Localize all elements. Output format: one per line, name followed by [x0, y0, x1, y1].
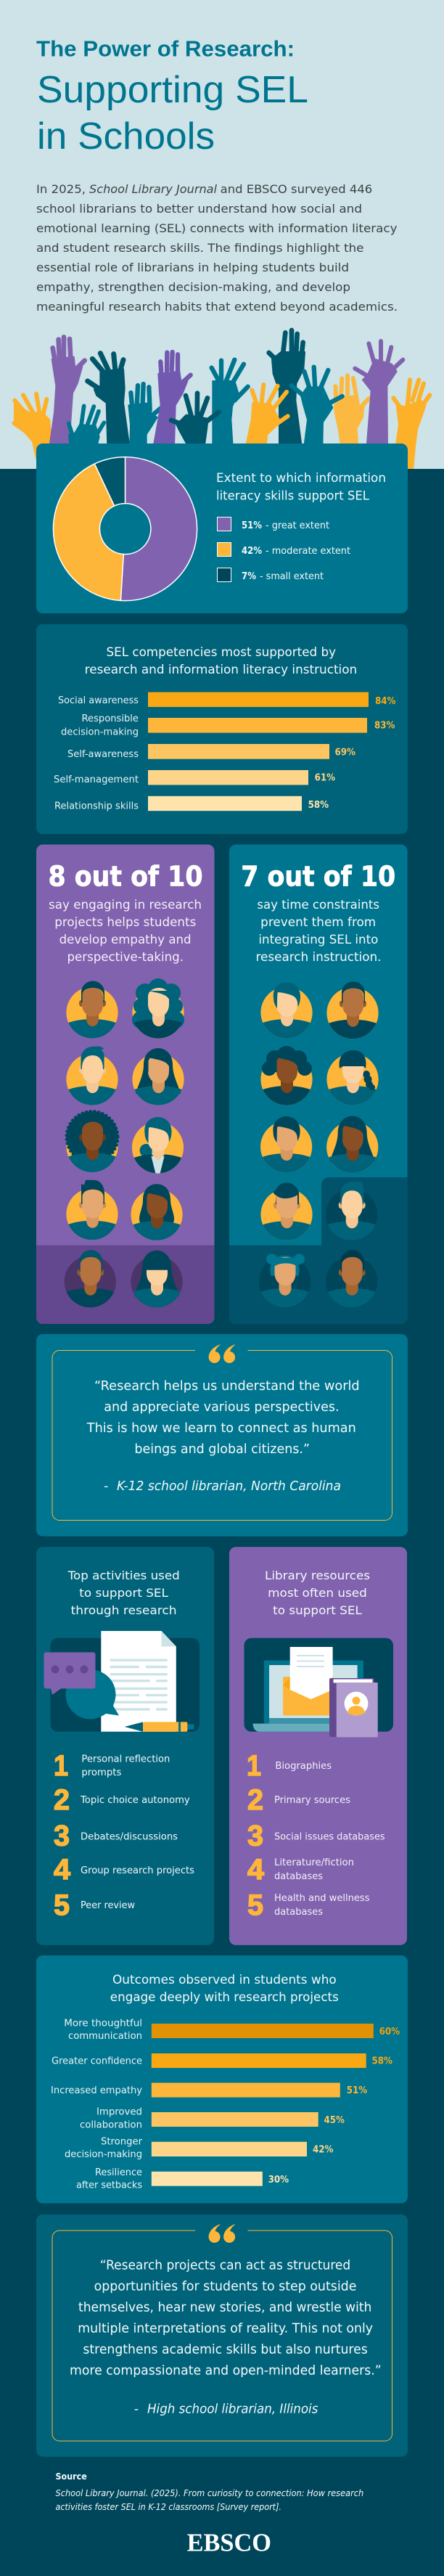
people icons: purple panel: [59, 978, 189, 1311]
bar labels: Greater confidence: [52, 2056, 142, 2067]
person 3: [62, 1046, 123, 1108]
quote frame: [52, 2231, 392, 2441]
ranked list: activities: Group research projects: [81, 1865, 194, 1876]
quote attribution: High school librarian, Illinois: [147, 2403, 318, 2417]
legend: - moderate extent: [266, 545, 350, 557]
legend: 7%: [242, 571, 256, 582]
ranked list: resources: Health and wellness: [274, 1892, 370, 1904]
ranked list: activities: Peer review: [81, 1900, 135, 1911]
panel: quote 1: [36, 1334, 408, 1537]
person 20: [321, 1250, 382, 1311]
person 18: [321, 1182, 382, 1243]
icon: orange hand 14: [393, 380, 429, 468]
bar labels: [51, 2017, 142, 2191]
text: 7 out of 10 description: [255, 898, 382, 964]
heading: outcomes: engage deeply with research projects: [110, 1990, 339, 2004]
quote text: [86, 1378, 360, 1457]
logo: EBSCO: EBSCO: [187, 2529, 271, 2557]
intro text block: empathy, strengthen decision-making, and develop: [36, 280, 350, 294]
ranked list: activities: Personal reflection: [81, 1753, 170, 1765]
bar labels: communication: [68, 2030, 142, 2042]
text: 7 out of 10 description: research instruction.: [255, 950, 382, 964]
legend: - small extent: [260, 571, 324, 582]
panel: quote 2: [36, 2215, 408, 2457]
legend: - great extent: [266, 520, 329, 531]
panel: SEL competencies bar chart: [36, 624, 408, 834]
source note: [55, 2471, 363, 2512]
person 13: [256, 1046, 317, 1108]
intro text block: School Library Journal: [89, 182, 218, 196]
stat: 7 out of 10: 7 out of 10: [241, 861, 395, 893]
quote text: themselves, hear new stories, and wrestle with: [78, 2300, 371, 2315]
icon: purple hand 2: [49, 337, 85, 446]
bar values: 84%: [375, 695, 396, 707]
intro text block: In 2025,: [36, 182, 86, 196]
heading: competencies: SEL competencies most supported by: [106, 645, 336, 659]
stat: 8 out of 10: 8 out of 10: [48, 861, 203, 893]
ranked list: resources: 2: [247, 1784, 263, 1816]
bar labels: Resilience: [95, 2167, 142, 2178]
illustration: raised hands: [14, 330, 429, 468]
bar values: 69%: [335, 747, 355, 759]
page background: light header: [0, 0, 444, 469]
bar labels: decision-making: [65, 2148, 142, 2160]
donut chart: [53, 457, 197, 601]
bar values: [308, 695, 396, 811]
quote text: more compassionate and open-minded learners.”: [70, 2363, 382, 2378]
bar labels: Self-management: [54, 774, 139, 785]
ranked list: resources: Biographies: [275, 1760, 332, 1772]
text: 8 out of 10 description: perspective-taking.: [67, 950, 184, 964]
heading: library resources: to support SEL: [273, 1603, 362, 1617]
ranked list: activities: 1: [54, 1750, 68, 1782]
quote attribution: -: [134, 2403, 139, 2417]
icon: teal hand 12: [292, 367, 342, 446]
heading: top activities: through research: [71, 1603, 177, 1617]
text: 7 out of 10 description: say time constraints: [257, 898, 379, 912]
people icons: teal panel: [254, 981, 383, 1311]
icon: purple hand 6: [154, 352, 191, 446]
bar values: 83%: [374, 720, 395, 732]
person 5: [65, 1110, 119, 1173]
quote text: “Research helps us understand the world: [94, 1378, 360, 1394]
text: 8 out of 10 description: [49, 898, 202, 964]
icon: purple hand 13: [355, 341, 403, 446]
person 17: [256, 1182, 317, 1243]
ranked list: activities: prompts: [81, 1767, 121, 1778]
icon: teal hand 3: [69, 406, 104, 446]
person 15: [256, 1116, 317, 1176]
icon: dark hand 7: [171, 393, 219, 446]
bars: [148, 692, 369, 811]
intro text block: essential role of librarians in helping students build: [36, 261, 349, 274]
legend: [218, 517, 350, 582]
title: The Power of Research:: [36, 36, 295, 61]
person 6: [132, 1117, 184, 1174]
icon: orange hand 10: [246, 385, 288, 446]
bar labels: Relationship skills: [54, 801, 139, 812]
quote text: and appreciate various perspectives.: [104, 1399, 340, 1415]
ranked list: resources: databases: [274, 1870, 323, 1882]
person 11: [256, 982, 317, 1042]
ranked list: resources: Literature/fiction: [274, 1857, 354, 1868]
ranked list: activities: 4: [54, 1854, 71, 1886]
person 14: [322, 1050, 383, 1108]
bar values: 42%: [313, 2144, 334, 2156]
intro text block: emotional learning (SEL) connects with information literacy: [36, 221, 398, 235]
person 12: [322, 981, 383, 1042]
bar labels: [54, 695, 139, 812]
quote attribution: K-12 school librarian, North Carolina: [117, 1479, 341, 1494]
bar labels: Improved: [96, 2106, 142, 2118]
ranked list: activities: 5: [54, 1889, 70, 1921]
ranked list: resources: 1: [247, 1750, 261, 1782]
text: 8 out of 10 description: develop empathy and: [59, 933, 192, 946]
panel: outcomes bar chart: [36, 1955, 408, 2204]
person 7: [62, 1180, 123, 1243]
icon: quotation mark: [209, 2224, 236, 2243]
quote text: [70, 2259, 382, 2378]
panel: library resources: [229, 1547, 407, 1945]
panel: top activities: [36, 1547, 214, 1945]
bar labels: Increased empathy: [51, 2085, 142, 2096]
icon: light orange hand 11: [334, 375, 369, 446]
bar labels: Responsible: [81, 713, 139, 724]
ranked list: resources: 3: [247, 1820, 263, 1852]
text: 8 out of 10 description: say engaging in research: [49, 898, 202, 912]
bar values: 58%: [371, 2056, 392, 2067]
bar values: 45%: [324, 2114, 345, 2126]
ranked list: resources: Social issues databases: [274, 1831, 385, 1842]
ranked list: resources: databases: [274, 1906, 323, 1918]
person 19: [254, 1254, 315, 1311]
intro text block: and student research skills. The findings highlight the: [36, 241, 364, 255]
bar labels: decision-making: [61, 726, 139, 737]
bar values: 60%: [379, 2026, 400, 2037]
icon: teal hand 8: [212, 360, 248, 446]
quote frame: [52, 1350, 392, 1520]
legend: 42%: [242, 545, 262, 557]
panel: 8 out of 10: [36, 845, 215, 1324]
text: 7 out of 10 description: prevent them from: [260, 915, 376, 929]
ranked list: activities: 2: [54, 1784, 70, 1816]
heading: top activities: Top activities used: [67, 1569, 180, 1582]
heading: top activities: to support SEL: [79, 1586, 168, 1600]
person 2: [128, 978, 189, 1042]
heading: outcomes: Outcomes observed in students who: [112, 1973, 337, 1987]
source note: Source: [55, 2471, 87, 2482]
bar labels: after setbacks: [76, 2179, 142, 2191]
quote text: opportunities for students to step outside: [94, 2280, 356, 2294]
person 16: [322, 1116, 383, 1176]
bar labels: Self-awareness: [67, 748, 139, 760]
heading: competencies: research and information literacy instruction: [85, 663, 357, 676]
quote text: This is how we learn to connect as human: [86, 1420, 356, 1436]
heading: competencies: [85, 645, 357, 676]
source note: activities foster SEL in K-12 classrooms [Survey report].: [55, 2501, 281, 2512]
panel: 7 out of 10: [229, 845, 408, 1324]
bar labels: collaboration: [80, 2119, 142, 2131]
illustration: laptop, envelope and book: [244, 1638, 393, 1737]
intro text block: [36, 182, 398, 314]
ranked list: activities: [54, 1750, 194, 1921]
intro text block: school librarians to better understand how social and: [36, 202, 362, 216]
source note: School Library Journal. (2025). From curiosity to connection: How research: [55, 2487, 363, 2498]
intro text block: and EBSCO surveyed 446: [221, 182, 372, 196]
ranked list: resources: 5: [247, 1889, 263, 1921]
title: Supporting SEL: [37, 69, 308, 111]
heading: extent: Extent to which information: [216, 471, 386, 485]
person 10: [126, 1251, 187, 1311]
ranked list: activities: Topic choice autonomy: [80, 1794, 190, 1806]
heading: outcomes: [110, 1973, 339, 2004]
legend: 51%: [242, 520, 262, 531]
person 1: [62, 981, 123, 1042]
heading: library resources: Library resources: [265, 1569, 370, 1582]
ranked list: resources: [247, 1750, 385, 1921]
illustration: document and speech bubbles: [44, 1631, 200, 1732]
heading: library resources: [265, 1569, 370, 1617]
intro text block: meaningful research habits that extend beyond academics.: [36, 300, 398, 314]
bar labels: Social awareness: [58, 695, 139, 706]
bar values: 51%: [347, 2085, 368, 2096]
icon: teal hand 5: [128, 384, 161, 446]
ranked list: activities: Debates/discussions: [81, 1831, 178, 1842]
quote text: “Research projects can act as structured: [100, 2259, 350, 2273]
bar values: [268, 2026, 400, 2185]
quote text: strengthens academic skills but also nurtures: [83, 2342, 368, 2357]
quote text: multiple interpretations of reality. This not only: [78, 2321, 373, 2336]
icon: quotation mark: [209, 1344, 236, 1363]
bar labels: More thoughtful: [64, 2017, 142, 2029]
icon: dark hand 4: [88, 353, 129, 446]
bar values: 58%: [308, 799, 329, 811]
ranked list: activities: 3: [54, 1820, 70, 1852]
bar labels: Stronger: [101, 2136, 142, 2148]
person 8: [126, 1184, 187, 1243]
icon: dark hand 9: [269, 330, 305, 446]
quote text: beings and global citizens.”: [134, 1442, 310, 1457]
heading: extent: literacy skills support SEL: [216, 489, 370, 503]
title: [36, 36, 308, 158]
person 9: [59, 1250, 120, 1311]
text: 8 out of 10 description: projects helps students: [54, 915, 196, 929]
person 4: [128, 1048, 189, 1108]
icon: orange hand 1: [14, 394, 53, 459]
quote attribution: -: [104, 1479, 108, 1494]
ranked list: resources: 4: [247, 1854, 265, 1886]
text: 7 out of 10 description: integrating SEL into: [258, 933, 378, 946]
heading: library resources: most often used: [268, 1586, 367, 1600]
heading: extent: [216, 471, 386, 503]
bars: [152, 2024, 374, 2186]
ranked list: resources: Primary sources: [274, 1794, 350, 1806]
panel: donut chart card: [36, 443, 408, 613]
bar values: 61%: [315, 772, 336, 784]
bar values: 30%: [268, 2174, 289, 2185]
heading: top activities: [67, 1569, 180, 1617]
title: in Schools: [37, 115, 215, 158]
